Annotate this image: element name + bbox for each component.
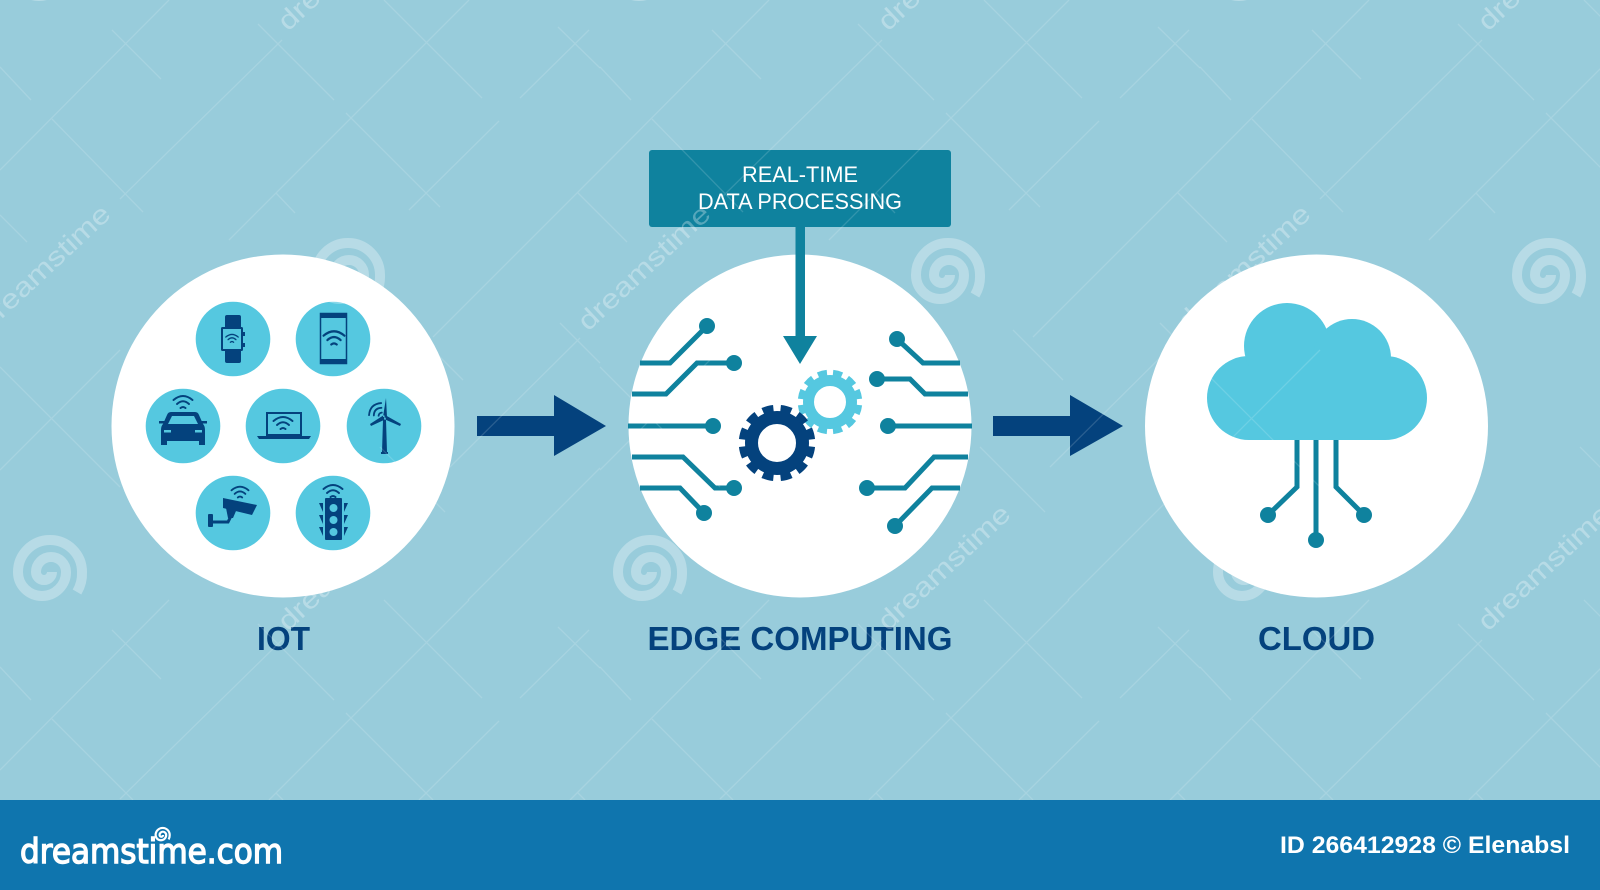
watermark pattern: dreamstime: [872, 499, 1016, 636]
heading: cloud: CLOUD: [1258, 620, 1375, 657]
icon: smartwatch: [196, 302, 270, 376]
circuit traces right: [859, 331, 972, 534]
watermark pattern: dreamstime: [1172, 199, 1316, 336]
watermark pattern: dreamstime: [272, 499, 416, 636]
footer image id and credit: ID 266412928 © Elenabsl: [1280, 832, 1570, 859]
circuit traces left: [628, 318, 742, 521]
footer bar: [0, 800, 1600, 890]
icon: cloud: [1207, 303, 1427, 440]
icon: wind turbine: [347, 389, 421, 463]
cloud connectors: [1260, 438, 1372, 548]
icon: connected car: [146, 389, 220, 463]
watermark pattern: dreamstime: [1472, 499, 1600, 636]
panel: cloud circle: [1145, 254, 1488, 598]
watermark pattern: dreamstime: [572, 199, 716, 336]
callout: real-time data processing: DATA PROCESSING: [698, 189, 902, 214]
heading: IoT: IOT: [257, 620, 310, 657]
panel: edge computing circle: [628, 254, 972, 598]
icon: laptop: [246, 389, 320, 463]
icon: light gear: [801, 373, 859, 431]
heading: edge computing: EDGE COMPUTING: [648, 620, 952, 657]
icon: security camera: [196, 476, 270, 550]
arrow: edge to cloud: [993, 395, 1123, 456]
panel: IoT circle: [112, 254, 454, 598]
footer logo: dreamstime.com: [20, 832, 283, 872]
callout: real-time data processing: REAL-TIME: [742, 162, 858, 187]
callout: real-time data processing: [649, 150, 951, 227]
icon: dark gear: [742, 408, 812, 478]
arrow: callout to gears: [783, 227, 817, 364]
arrow: IoT to edge: [477, 395, 606, 456]
icon: traffic light: [296, 476, 370, 550]
icon: smartphone: [296, 302, 370, 376]
